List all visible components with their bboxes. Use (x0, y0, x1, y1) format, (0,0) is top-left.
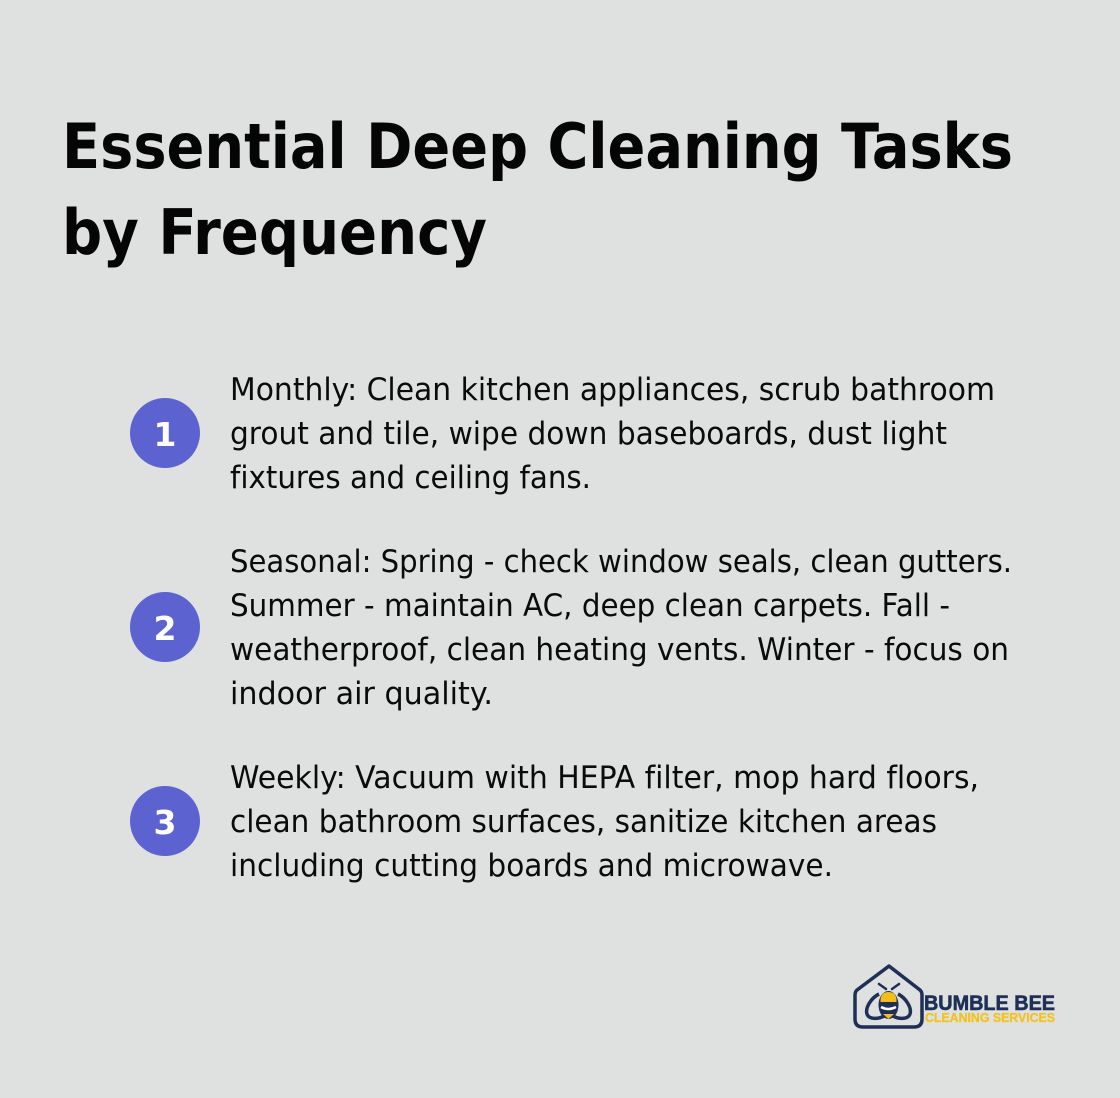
logo tagline: CLEANING SERVICES (925, 1011, 1055, 1025)
text: seasonal tasks (230, 544, 1012, 712)
icon: house with bee (855, 966, 922, 1027)
text: weekly tasks: including cutting boards and microwave. (230, 848, 833, 884)
number badge 3 (130, 786, 200, 856)
text: seasonal tasks: indoor air quality. (230, 676, 493, 712)
text: seasonal tasks: Summer - maintain AC, deep clean carpets. Fall - (230, 588, 950, 624)
number badge 2 (130, 592, 200, 662)
number badge 2: 2 (154, 609, 176, 648)
text: seasonal tasks: Seasonal: Spring - check window seals, clean gutters. (230, 544, 1012, 580)
logo wordmark: BUMBLE BEE (924, 992, 1055, 1015)
item 3: weekly (130, 760, 979, 884)
text: monthly tasks: grout and tile, wipe down baseboards, dust light (230, 416, 947, 452)
text: monthly tasks: Monthly: Clean kitchen appliances, scrub bathroom (230, 372, 995, 408)
item 2: seasonal (130, 544, 1012, 712)
title (62, 110, 1013, 269)
logo: Bumble Bee Cleaning Services (855, 966, 1055, 1027)
number badge 1 (130, 398, 200, 468)
text: monthly tasks (230, 372, 995, 496)
text: weekly tasks (230, 760, 979, 884)
number badge 3: 3 (154, 803, 176, 842)
title: by Frequency (62, 196, 487, 269)
number badge 1: 1 (154, 415, 176, 454)
item 1: monthly (130, 372, 995, 496)
text: seasonal tasks: weatherproof, clean heating vents. Winter - focus on (230, 632, 1009, 668)
text: weekly tasks: Weekly: Vacuum with HEPA filter, mop hard floors, (230, 760, 979, 796)
text: monthly tasks: fixtures and ceiling fans. (230, 460, 591, 496)
text: weekly tasks: clean bathroom surfaces, sanitize kitchen areas (230, 804, 937, 840)
title: Essential Deep Cleaning Tasks (62, 110, 1013, 183)
